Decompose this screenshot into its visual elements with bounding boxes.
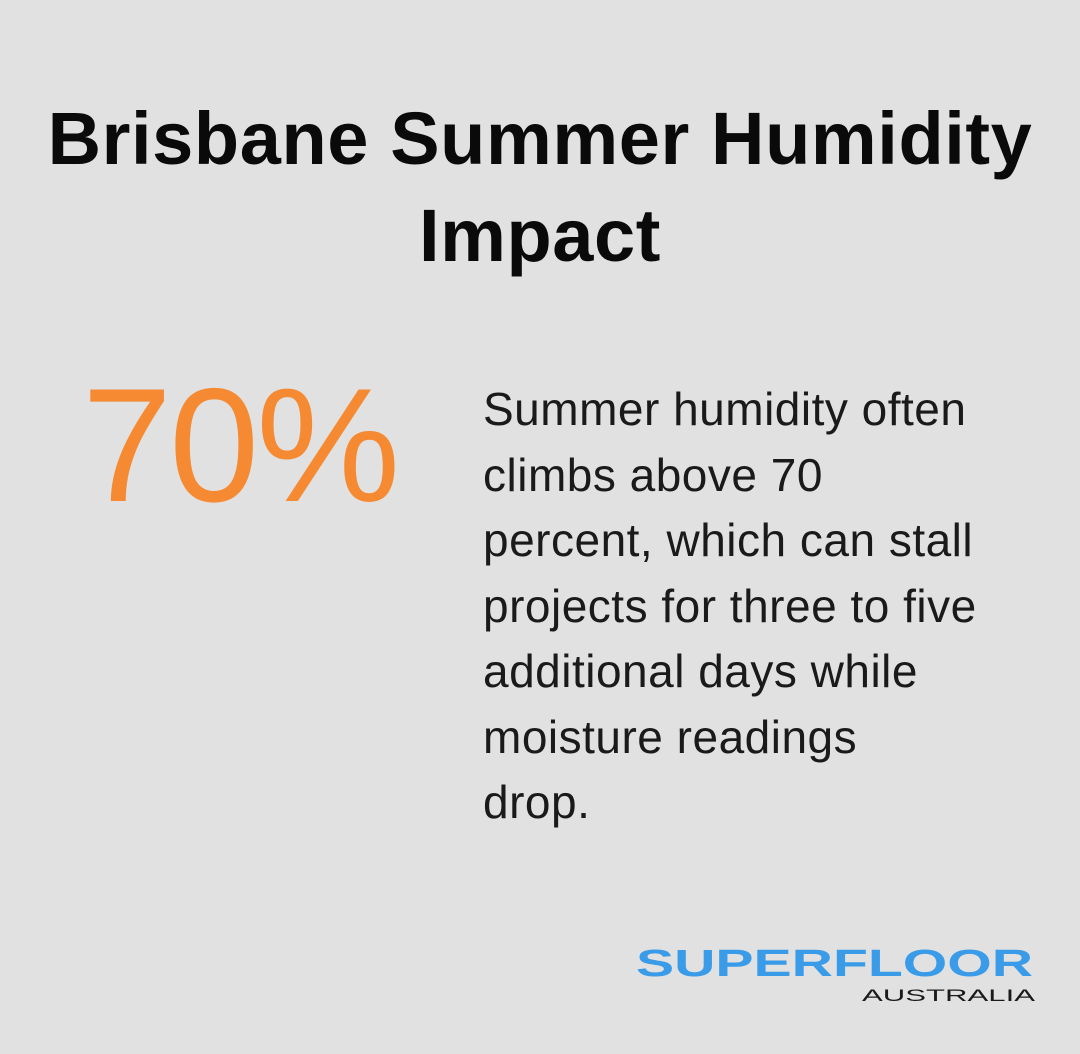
stat: 70%: 70% [82, 355, 397, 536]
title: Brisbane Summer Humidity [48, 97, 1032, 180]
description text: drop. [483, 776, 590, 828]
description text [483, 383, 977, 828]
logo: SUPERFLOOR [636, 943, 1033, 985]
title: Impact [419, 194, 661, 277]
description text: additional days while [483, 645, 918, 697]
description text: Summer humidity often [483, 383, 966, 435]
logo: AUSTRALIA [862, 986, 1035, 1005]
description text: moisture readings [483, 710, 857, 762]
description text: climbs above 70 [483, 448, 823, 500]
description text: projects for three to five [483, 580, 977, 632]
description text: percent, which can stall [483, 514, 973, 566]
title [48, 97, 1032, 277]
logo [636, 943, 1035, 1005]
